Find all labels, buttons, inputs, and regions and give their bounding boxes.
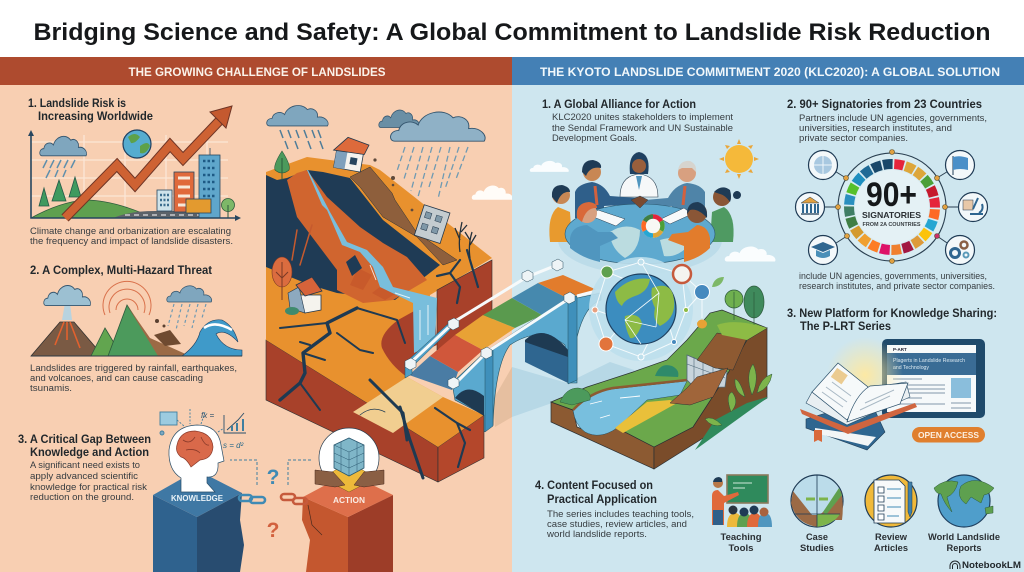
icon: trees	[39, 177, 81, 206]
illustration: P-LRT tablet	[882, 339, 985, 418]
globe table	[565, 204, 715, 264]
section 2 body: universities, research institutes, and	[799, 123, 952, 134]
river	[573, 381, 687, 435]
stat label: SIGNATORIES	[862, 210, 921, 220]
icon: mountains with slide	[91, 305, 190, 356]
badge: open access: OPEN ACCESS	[918, 430, 979, 440]
section 4 body: The series includes teaching tools,	[547, 509, 694, 520]
soil right face	[654, 328, 767, 469]
person: left, yellow	[549, 185, 572, 242]
broken chain: red	[281, 494, 307, 504]
green surface	[551, 310, 767, 447]
icon: case studies	[791, 475, 843, 527]
section 4 body: case studies, review articles, and	[547, 519, 687, 530]
illustration: P-LRT tablet: Plagerts in Landslide Research	[893, 358, 965, 364]
icon: cloud left	[267, 106, 328, 149]
illustration: P-LRT tablet: and Technology	[893, 365, 930, 371]
icon: government	[796, 192, 824, 222]
brown slope	[697, 333, 747, 370]
icon: dead trees	[455, 222, 476, 258]
stat: 90+: 90+	[866, 176, 917, 214]
network nodes	[592, 259, 710, 360]
icon: storm cloud	[167, 286, 212, 330]
icon: graduation cap	[808, 236, 838, 264]
section 3 body: knowledge for practical risk	[30, 482, 147, 493]
section 3 body: A significant need exists to	[30, 460, 140, 471]
arrow: dashed to action	[288, 460, 313, 485]
debris	[373, 158, 413, 211]
icon: review articles	[865, 475, 917, 527]
section 2 body: and volcanoes, and can cause cascading	[30, 373, 203, 384]
section 2 heading: 2. 90+ Signatories from 23 Countries	[787, 97, 982, 111]
label: teaching tools: Tools	[728, 543, 754, 554]
illustration: multi-hazard scene	[31, 281, 242, 356]
section 2 body: Partners include UN agencies, governments,	[799, 113, 987, 124]
section 2 heading: 2. A Complex, Multi-Hazard Threat	[30, 263, 212, 277]
section 3 heading: 3. A Critical Gap Between	[18, 432, 151, 446]
section 2 body: tsunamis.	[30, 383, 72, 394]
person: gray-haired man	[645, 161, 705, 212]
icon: flag	[946, 150, 974, 180]
person: man in suit	[575, 160, 638, 218]
illustration: global alliance meeting	[549, 152, 741, 274]
section 3 heading: Knowledge and Action	[30, 445, 149, 459]
clouds	[530, 161, 775, 261]
icon: SDG ring on table	[644, 216, 662, 236]
signatories ring	[824, 150, 959, 264]
brown rock face	[350, 167, 457, 265]
icon: head with brain	[169, 425, 224, 492]
arrow: dashed to knowledge	[230, 460, 257, 485]
icon: house on ridge	[331, 135, 370, 173]
illustration: restored terrain	[551, 286, 772, 469]
section 3 heading: 3. New Platform for Knowledge Sharing:	[787, 306, 997, 320]
question mark: red: ?	[267, 519, 279, 542]
bushes and leaves	[560, 388, 590, 405]
icon: research microscope	[958, 192, 988, 222]
section 1 body: the frequency and impact of landslide disasters.	[30, 236, 233, 247]
question mark: blue: ?	[267, 466, 279, 489]
terrain trees	[725, 286, 764, 328]
panel: the growing challenge of landslides	[0, 57, 513, 572]
icon: rain cloud	[40, 136, 87, 178]
bridge between panels	[405, 259, 601, 432]
chart: rising landslide risk	[28, 106, 241, 221]
cracks	[280, 225, 478, 478]
icon: volcano	[31, 285, 103, 356]
icon: damaged house	[285, 277, 322, 315]
buildings	[157, 148, 220, 218]
section 1 heading: 1. Landslide Risk is	[28, 96, 126, 110]
section 4 body: world landslide reports.	[546, 529, 647, 540]
section 1 heading: Increasing Worldwide	[38, 109, 153, 123]
bridge shadow	[512, 362, 640, 417]
river bank	[573, 380, 687, 410]
section 3 body: apply advanced scientific	[30, 471, 138, 482]
icon: tilted building	[414, 205, 450, 243]
icons: science symbols	[160, 409, 246, 450]
handshake	[631, 196, 648, 208]
action label: ACTION	[333, 496, 365, 505]
arrow: rising risk trend	[65, 106, 232, 218]
icon: UN	[808, 150, 838, 180]
bridge shadow on peach	[493, 367, 512, 427]
icon: action pillar	[302, 428, 393, 572]
gabion retaining wall	[687, 355, 727, 388]
river and waterfall	[307, 170, 437, 353]
heading: right panel: THE KYOTO LANDSLIDE COMMITMENT 2020 (KLC2020): A GLOBAL SOLUTION	[540, 65, 1000, 79]
section 3 body: reduction on the ground.	[30, 492, 134, 503]
section 1 body: the Sendal Framework and UN Sustainable	[552, 123, 733, 134]
label: review articles: Review	[875, 532, 908, 543]
person: right, green	[710, 187, 741, 242]
section 1 body: KLC2020 unites stakeholders to implement	[552, 112, 733, 123]
label: case studies: Studies	[800, 543, 834, 554]
icon: globe	[123, 130, 151, 158]
section 4 heading: Practical Application	[547, 492, 657, 506]
partner icons	[796, 150, 988, 264]
panel: the Kyoto Landslide Commitment	[405, 57, 1024, 572]
icon: tree on ridge	[275, 151, 289, 180]
illustration: cracked landslide block	[266, 106, 492, 482]
orange slide	[287, 170, 427, 303]
icon: white cloud at border	[472, 185, 513, 200]
section 4 heading: 4. Content Focused on	[535, 478, 653, 492]
section 1 body: Development Goals.	[552, 133, 637, 144]
icon: storm clouds right	[379, 110, 485, 199]
section 2 extra text: include UN agencies, governments, universities,	[799, 271, 987, 282]
label: review articles: Articles	[874, 543, 908, 554]
label: teaching tools: Teaching	[720, 532, 762, 543]
icon: sun	[719, 139, 759, 179]
soil front face	[551, 402, 654, 469]
icon: orange tree	[272, 257, 292, 300]
icons: science symbols: s = d²	[223, 441, 244, 450]
person: woman in white coat	[620, 152, 658, 197]
icon: world landslide reports	[934, 475, 994, 527]
icon: knowledge pillar	[153, 425, 244, 572]
section 1 heading: 1. A Global Alliance for Action	[542, 97, 696, 111]
section 2 body: Landslides are triggered by rainfall, earthquakes,	[30, 363, 237, 374]
label: case studies: Case	[806, 532, 828, 543]
knowledge label: KNOWLEDGE	[171, 494, 224, 503]
person: front left, blue	[570, 202, 618, 262]
icon: teaching tools	[712, 475, 772, 527]
watermark: NotebookLM: NotebookLM	[962, 560, 1021, 571]
icon: gears	[946, 236, 974, 264]
icon: roadside tree	[222, 198, 234, 218]
broken chain: blue	[239, 495, 265, 503]
illustration: open book	[800, 337, 917, 450]
badge: open access	[912, 427, 985, 442]
stat sub-label: FROM 2A COUNTRIES	[862, 222, 921, 228]
title: Bridging Science and Safety: A Global Commitment to Landslide Risk Reduction	[34, 19, 990, 46]
cream patch	[353, 377, 443, 433]
yellow stripe	[615, 400, 677, 433]
heading: left panel: THE GROWING CHALLENGE OF LANDSLIDES	[128, 65, 386, 79]
illustration: globe network	[589, 257, 724, 361]
table halo	[558, 206, 722, 274]
section 3 heading: The P-LRT Series	[800, 319, 891, 333]
globe	[606, 262, 676, 344]
illustration: P-LRT tablet: P-ART	[893, 347, 907, 352]
section 1 body: Climate change and orbanization are escalating	[30, 226, 231, 237]
label: world landslide reports: World Landslide	[928, 532, 1000, 543]
label: world landslide reports: Reports	[946, 543, 982, 554]
axes	[31, 134, 238, 218]
icon: earthquake rings	[103, 281, 151, 315]
icon: tsunami wave	[182, 320, 242, 356]
person: front right, orange	[668, 202, 710, 262]
section 2 extra text: research institutes, and private sector companies.	[799, 281, 995, 292]
icons: science symbols: fx =	[201, 411, 214, 420]
icon: dome with structure in hands	[315, 428, 384, 492]
section 2 body: private sector companies.	[799, 133, 908, 144]
